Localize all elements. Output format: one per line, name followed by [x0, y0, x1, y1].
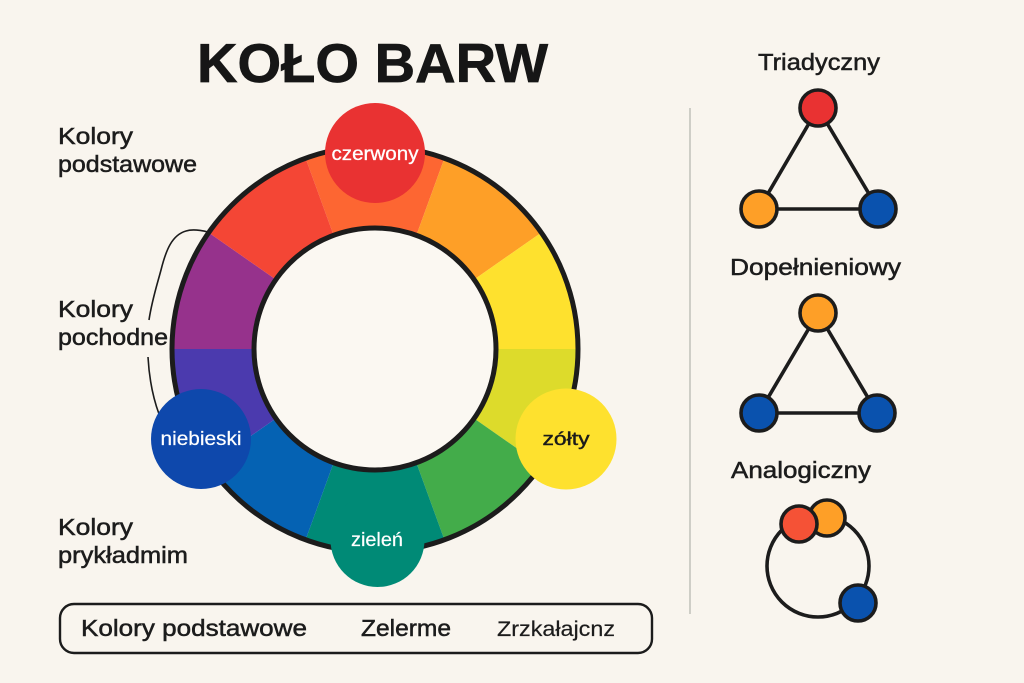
- colour wheel: [172, 146, 578, 552]
- label: example colours: prykładmim: [58, 542, 188, 568]
- colour node: red: czerwony: [332, 144, 419, 165]
- colour node: red: [325, 103, 425, 203]
- vertical divider: [689, 108, 691, 614]
- diagram: complementary: [741, 295, 895, 431]
- wheel outlines: [172, 146, 578, 552]
- colour node: green: [330, 493, 424, 587]
- colour node: blue: niebieski: [160, 429, 242, 450]
- colour node: green: zieleń: [351, 530, 403, 551]
- diagram: triadic: [741, 90, 896, 227]
- colour node: yellow: zółty: [542, 429, 590, 449]
- label: primary colours: Kolory: [58, 123, 134, 149]
- label: secondary colours: Kolory: [58, 296, 134, 322]
- wheel segments: [172, 146, 578, 552]
- colour node: yellow: [516, 388, 616, 490]
- legend box: [60, 604, 652, 653]
- legend box: Kolory podstawowe: [81, 615, 307, 641]
- heading: complementary: Dopełnieniowy: [730, 254, 902, 280]
- label: primary colours: podstawowe: [58, 151, 197, 177]
- diagram: analogous: [767, 500, 876, 621]
- label: example colours: Kolory: [58, 514, 134, 540]
- title: KOŁO BARW: [197, 32, 548, 94]
- colour node: blue: [151, 389, 251, 489]
- label: example colours: [58, 514, 188, 568]
- heading: triadic: Triadyczny: [758, 49, 881, 75]
- label: primary colours: [58, 123, 197, 177]
- legend box: Zelerme: [361, 615, 451, 641]
- label: secondary colours: pochodne: [58, 324, 168, 350]
- heading: analogous: Analogiczny: [731, 457, 872, 483]
- legend box: Zrzkałajcnz: [497, 618, 615, 641]
- bracket linking secondary colours: [148, 230, 208, 414]
- label: secondary colours: [58, 296, 168, 350]
